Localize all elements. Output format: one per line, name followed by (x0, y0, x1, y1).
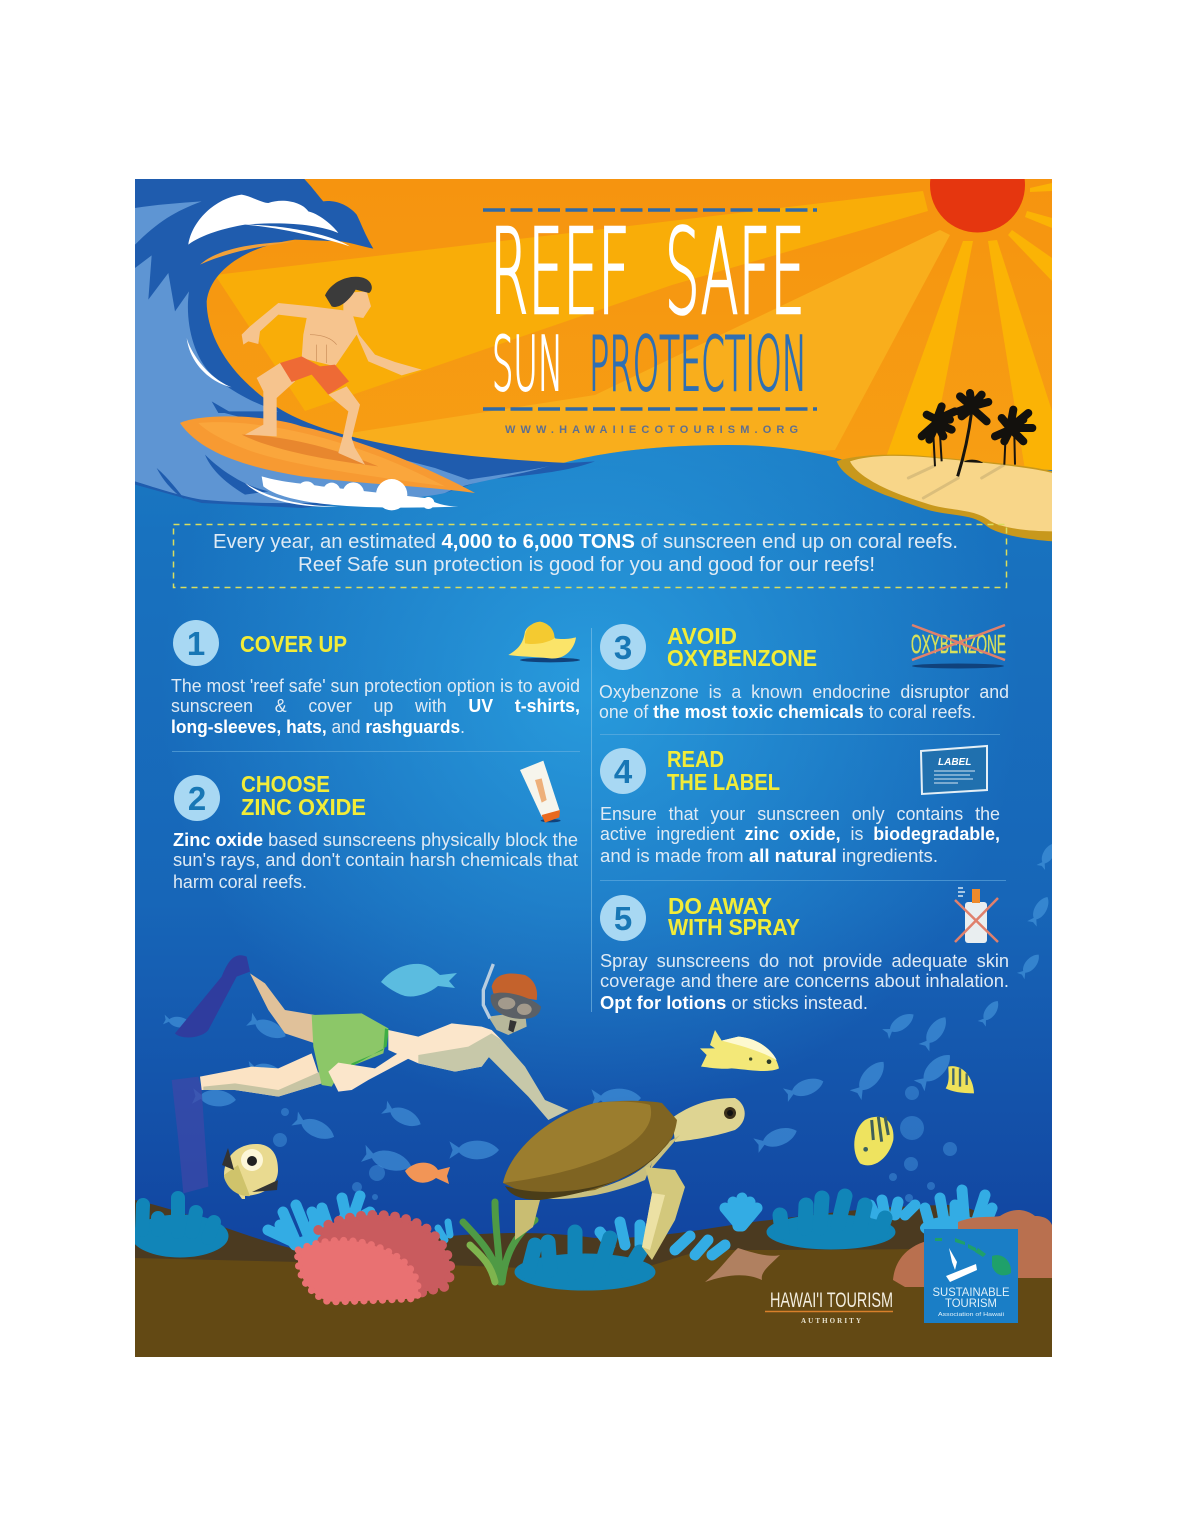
icon: crossed out spray (955, 888, 998, 943)
step 2: choose zinc oxide (173, 761, 578, 892)
step 1: cover up: long-sleeves, hats, and rashguards. (171, 717, 465, 737)
coral: light blue branches (268, 1190, 992, 1255)
logo: Sustainable Tourism Association of Hawaii: SUSTAINABLE (932, 1287, 1010, 1299)
step 1: cover up: COVER UP (240, 631, 347, 657)
sun (930, 179, 1025, 232)
step 3: avoid oxybenzone: 3 (614, 629, 632, 666)
step 1: cover up: sunscreen & cover up with UV t-shirts, (171, 696, 580, 716)
yellow striped fish (854, 1117, 893, 1165)
coral: red (298, 1215, 450, 1302)
step 2: choose zinc oxide: 2 (188, 780, 206, 817)
step 1: cover up (171, 620, 580, 737)
step 5: do away with spray: coverage and there are concerns about inhalation. (600, 971, 1009, 991)
divider (172, 734, 1006, 880)
step 5: do away with spray: 5 (614, 900, 632, 937)
seabed (135, 1200, 1052, 1357)
step 2: choose zinc oxide: harm coral reefs. (173, 872, 307, 892)
snorkeler (172, 955, 568, 1193)
step 5: do away with spray: Opt for lotions or sticks instead. (600, 993, 868, 1013)
logo: Hawaii Tourism Authority (765, 1289, 893, 1325)
logo: Hawaii Tourism Authority: HAWAI'I TOURISM (770, 1289, 893, 1312)
step 3: avoid oxybenzone: one of the most toxic chemicals to coral reefs. (599, 702, 976, 722)
infographic poster: REEF SAFE (490, 203, 805, 341)
step 4: read the label: and is made from all natural ingredients. (600, 846, 938, 866)
step 5: do away with spray (600, 888, 1009, 1013)
island with palm trees (837, 393, 1052, 541)
butterfly fish (222, 1144, 278, 1199)
blue fish (381, 964, 457, 997)
infographic poster: PROTECTION (589, 320, 807, 408)
wave curl (135, 178, 595, 508)
coral: brown right (893, 1210, 1052, 1287)
title: SUN (492, 320, 563, 408)
step 4: read the label: Ensure that your sunscreen only contains the (600, 804, 1000, 824)
step 3: avoid oxybenzone: Oxybenzone is a known endocrine disruptor and (599, 682, 1009, 702)
foam under board (245, 476, 458, 510)
step 3: avoid oxybenzone (599, 623, 1009, 722)
step 4: read the label (600, 746, 1000, 866)
title: WWW.HAWAIIECOTOURISM.ORG (505, 424, 798, 436)
orange fish (405, 1163, 450, 1184)
sea turtle (503, 1098, 745, 1260)
wave and surfer (135, 178, 595, 510)
step 4: read the label: THE LABEL (667, 769, 780, 795)
wave body (135, 255, 552, 503)
corals (132, 1190, 1052, 1302)
step 4: read the label: active ingredient zinc oxide, is biodegradable, (600, 824, 1000, 844)
step 2: choose zinc oxide: sun's rays, and don't contain harsh chemicals that (173, 850, 578, 870)
icon: label card: LABEL (938, 757, 971, 768)
step 2: choose zinc oxide: ZINC OXIDE (241, 794, 366, 820)
surfboard (180, 416, 475, 493)
step 2: choose zinc oxide: CHOOSE (241, 771, 330, 797)
step 4: read the label: 4 (614, 753, 633, 790)
surfer (242, 277, 422, 465)
step 5: do away with spray: WITH SPRAY (668, 914, 800, 940)
icon: crossed out oxybenzone (911, 625, 1006, 668)
step 3: avoid oxybenzone: AVOID (667, 623, 737, 649)
seaweed (463, 1202, 535, 1282)
step 3: avoid oxybenzone: OXYBENZONE (667, 645, 817, 671)
icon: crossed out oxybenzone: OXYBENZONE (911, 629, 1006, 659)
logo: Sustainable Tourism Association of Hawaii (924, 1229, 1018, 1323)
bubbles (273, 1086, 957, 1202)
step 5: do away with spray: Spray sunscreens do not provide adequate skin (600, 951, 1009, 971)
logo: Sustainable Tourism Association of Hawaii: TOURISM (945, 1298, 997, 1310)
step 1: cover up: 1 (187, 625, 205, 662)
intro callout: Every year, an estimated 4,000 to 6,000 TONS of sunscreen end up on coral reefs. (213, 531, 958, 553)
step 1: cover up: The most 'reef safe' sun protection option is to avoid (171, 676, 580, 696)
title (483, 203, 817, 436)
wave crest foam (187, 195, 350, 387)
logo: Sustainable Tourism Association of Hawaii: Association of Hawaii (938, 1312, 1004, 1318)
icon: sun hat (508, 622, 580, 662)
background fish school (163, 841, 1059, 1175)
icon: label card (921, 746, 987, 794)
intro callout (174, 524, 1006, 588)
icon: sunscreen tube (520, 761, 561, 823)
infographic poster (135, 179, 1052, 1357)
coral: teal mounds (132, 1196, 895, 1290)
step 4: read the label: READ (667, 746, 724, 772)
logo: Hawaii Tourism Authority: AUTHORITY (801, 1317, 861, 1325)
yellow fish group (222, 964, 974, 1199)
step 5: do away with spray: DO AWAY (668, 893, 772, 919)
step 2: choose zinc oxide: Zinc oxide based sunscreens physically block the (173, 830, 578, 850)
intro callout: Reef Safe sun protection is good for you and good for our reefs! (298, 554, 875, 576)
starfish (705, 1248, 780, 1282)
sky with sun rays (206, 179, 1052, 470)
ocean background (135, 445, 1052, 1248)
